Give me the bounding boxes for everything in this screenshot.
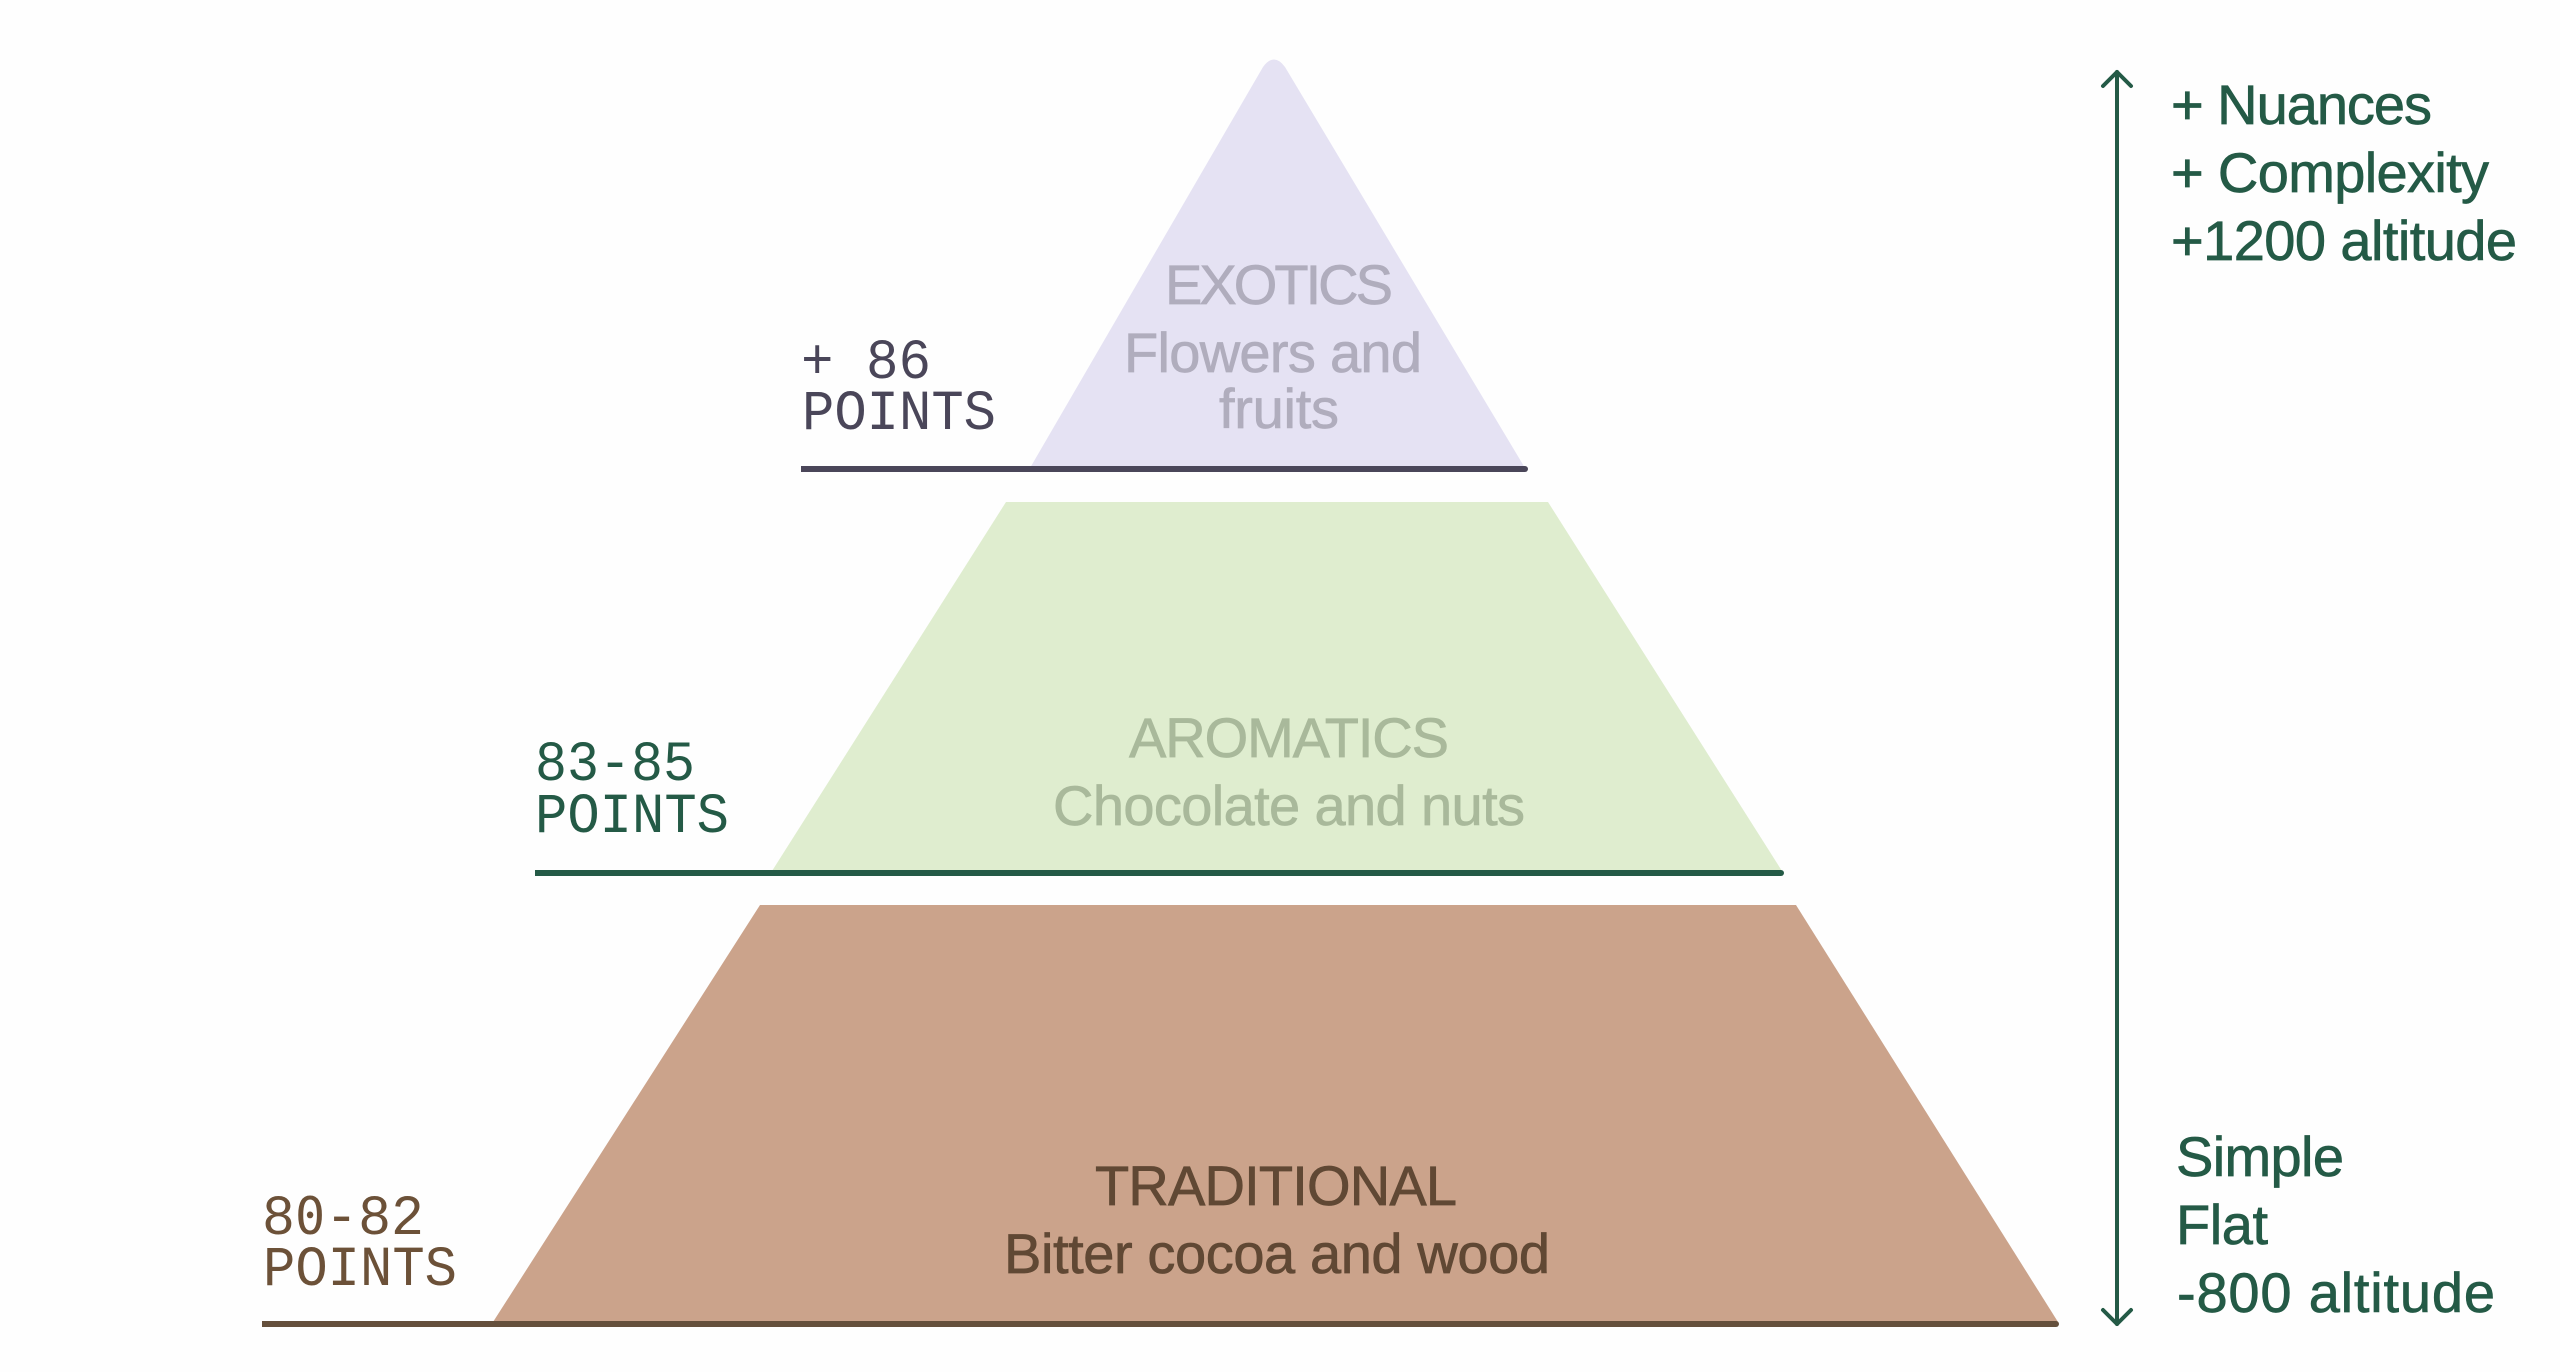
text: high altitude notes: + Nuances [2171,73,2432,136]
score label: +86 points: + 86 [801,332,931,396]
text: flowers and fruits: Flowers and [1124,321,1422,384]
score label: 83-85 points [535,734,729,850]
text: low altitude notes: -800 altitude [2177,1261,2495,1324]
text: chocolate and nuts: Chocolate and nuts [1053,774,1525,837]
pyramid tier: exotics [801,60,1528,472]
heading: exotics: EXOTICS [1165,253,1393,316]
heading: aromatics: AROMATICS [1129,706,1449,769]
baseline: exotics [801,466,1528,472]
text: low altitude notes: Simple [2176,1125,2344,1188]
score label: +86 points: POINTS [802,383,996,447]
text: bitter cocoa and wood: Bitter cocoa and wood [1004,1222,1550,1285]
text: low altitude notes [2176,1125,2495,1324]
score label: 80-82 points: POINTS [263,1239,457,1303]
arrow: altitude scale [2103,72,2131,1324]
baseline: traditional [262,1321,2059,1327]
text: flowers and fruits [1124,321,1422,440]
text: flowers and fruits: fruits [1219,377,1339,440]
score label: 83-85 points: POINTS [535,786,729,850]
baseline: aromatics [535,870,1784,876]
shape: exotics triangle [1030,60,1525,468]
text: low altitude notes: Flat [2176,1193,2268,1256]
text: high altitude notes [2171,73,2517,272]
shape: traditional trapezoid [493,905,2058,1322]
heading: traditional: TRADITIONAL [1095,1154,1457,1217]
score label: 80-82 points [262,1187,457,1303]
pyramid tier: aromatics [535,502,1784,876]
pyramid tier: traditional [262,905,2059,1327]
shape: aromatics trapezoid [772,502,1782,871]
score label: 83-85 points: 83-85 [535,734,695,798]
score label: 80-82 points: 80-82 [262,1187,424,1252]
score label: +86 points [801,332,996,447]
text: high altitude notes: + Complexity [2171,141,2489,204]
text: high altitude notes: +1200 altitude [2171,209,2517,272]
